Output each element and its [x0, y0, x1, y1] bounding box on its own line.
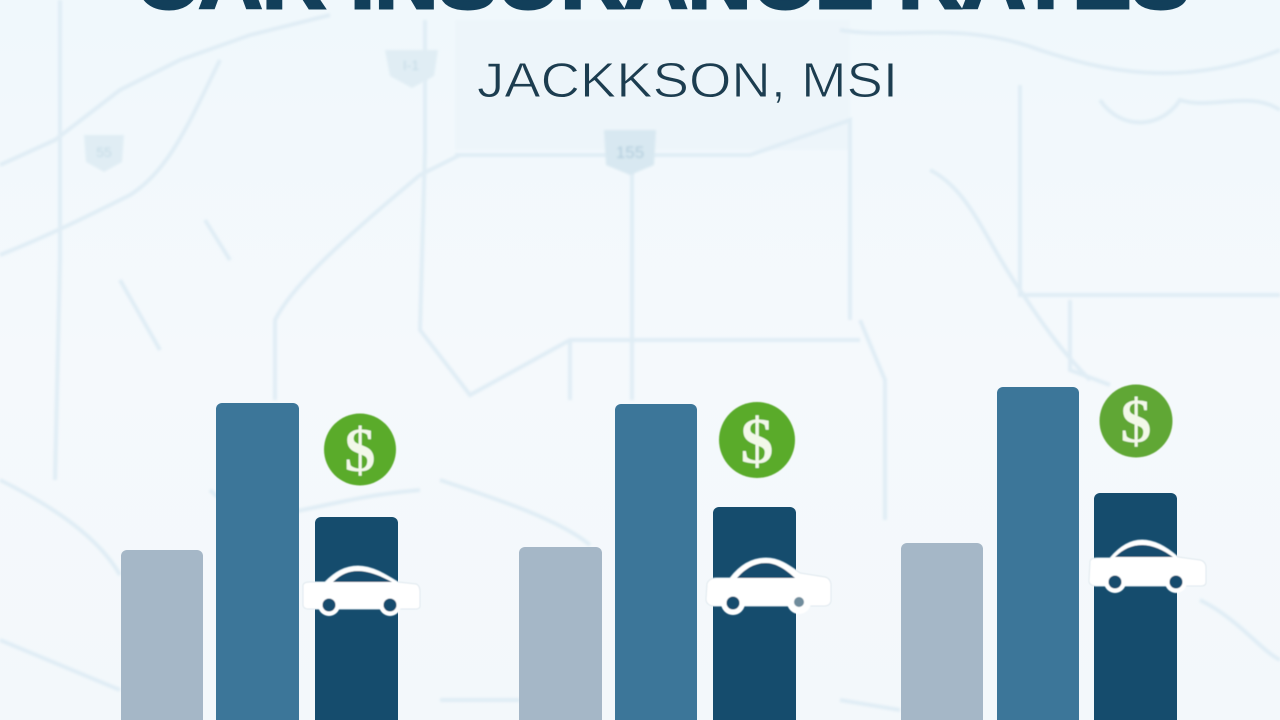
bar: group 1 medium	[216, 403, 299, 720]
bar: group 1 dark	[315, 517, 398, 720]
bar chart: group 1	[121, 403, 420, 720]
icon: car 1	[303, 566, 420, 616]
route shield: left: 55	[96, 144, 112, 160]
bar chart: group 2	[519, 402, 831, 720]
icon: car 2	[706, 558, 831, 615]
icon: dollar coin 1	[324, 414, 396, 486]
route shield: center	[604, 130, 656, 175]
bar: group 3 medium	[997, 387, 1079, 720]
bar: group 2 light	[519, 547, 602, 720]
route shield: left	[84, 135, 124, 172]
bar: group 2 dark	[713, 507, 796, 720]
icon: dollar coin 3: $	[1120, 388, 1152, 456]
icon: dollar coin 2: $	[740, 405, 774, 478]
bar: group 2 medium	[615, 404, 697, 720]
subtitle: JACKKSON, MSI	[477, 54, 898, 108]
icon: dollar coin 2	[719, 402, 795, 478]
route shield: I-55 upper: I-1	[403, 57, 419, 73]
bar chart: group 3	[901, 384, 1206, 720]
route shield: center: 155	[616, 143, 644, 162]
icon: car 3	[1089, 540, 1206, 593]
route shield: I-55 upper	[385, 50, 438, 88]
bar: group 3 light	[901, 543, 983, 720]
icon: dollar coin 1: $	[344, 417, 376, 485]
bar: group 1 light	[121, 550, 203, 720]
bar: group 3 dark	[1094, 493, 1177, 720]
icon: dollar coin 3	[1100, 384, 1172, 458]
